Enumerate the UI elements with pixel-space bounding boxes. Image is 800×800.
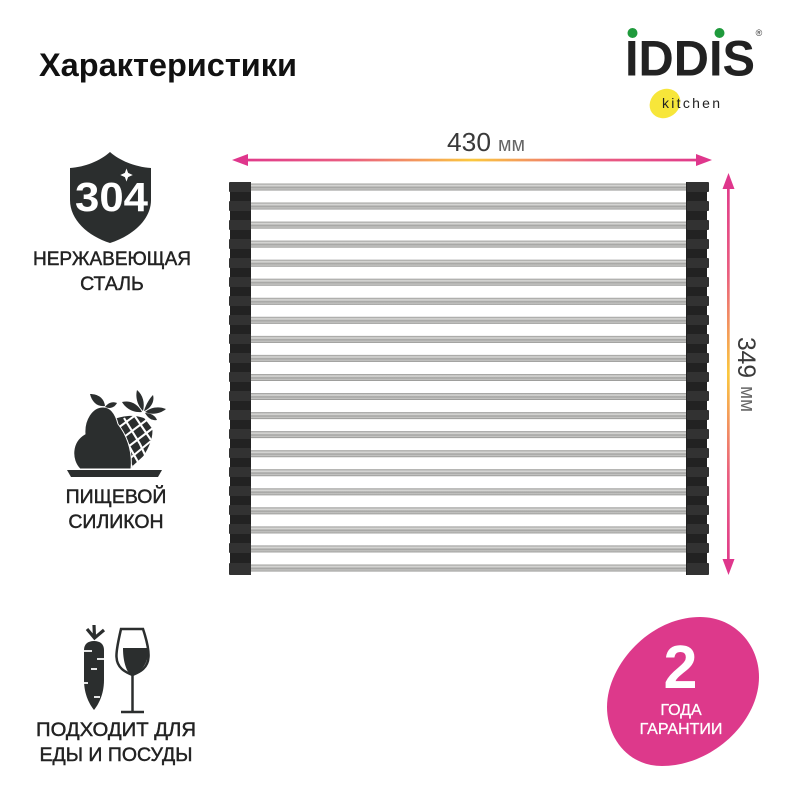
- strawberry body: [112, 416, 152, 469]
- label: stainless steel: НЕРЖАВЕЮЩАЯ: [33, 248, 191, 270]
- steel rods: [250, 184, 687, 572]
- icon: carrot and wine glass: [84, 625, 149, 712]
- width label: 430: [447, 127, 491, 157]
- label: suitable for food and dishes: ПОДХОДИТ ДЛЯ: [36, 719, 196, 741]
- label: food silicone: СИЛИКОН: [68, 511, 164, 533]
- plate: [67, 470, 162, 477]
- dimension arrow: height 349 mm: [722, 173, 734, 575]
- leaves: [122, 401, 142, 412]
- icon: 304 steel shield: 304: [75, 174, 148, 220]
- logo: IDDIS kitchen: [625, 28, 763, 124]
- badge: 2 year warranty: [607, 617, 759, 766]
- pear: [74, 407, 131, 469]
- right silicone strip: [686, 182, 709, 575]
- left silicone strip: [229, 182, 251, 575]
- badge: 2 year warranty: ГОДА: [660, 702, 702, 719]
- icon: fruit on plate: [67, 390, 166, 477]
- width label: мм: [498, 134, 525, 156]
- logo: IDDIS kitchen: kitchen: [662, 95, 720, 111]
- label: stainless steel: СТАЛЬ: [80, 273, 144, 295]
- icon: 304 steel shield: [70, 152, 151, 243]
- label: food silicone: ПИЩЕВОЙ: [66, 484, 166, 508]
- logo: IDDIS kitchen: ®: [756, 28, 763, 38]
- badge: 2 year warranty: ГАРАНТИИ: [640, 721, 722, 738]
- logo: IDDIS kitchen: IDDIS: [625, 30, 755, 86]
- height label: [732, 337, 760, 412]
- width label: [447, 127, 525, 157]
- badge: 2 year warranty: 2: [664, 633, 697, 701]
- product: roll-up drying rack: [229, 182, 709, 575]
- height label: мм: [736, 386, 758, 412]
- label: suitable for food and dishes: ЕДЫ И ПОСУДЫ: [40, 744, 192, 766]
- title: Характеристики: [39, 47, 297, 83]
- dimension arrow: width 430 mm: [232, 154, 712, 166]
- height label: 349: [732, 337, 760, 378]
